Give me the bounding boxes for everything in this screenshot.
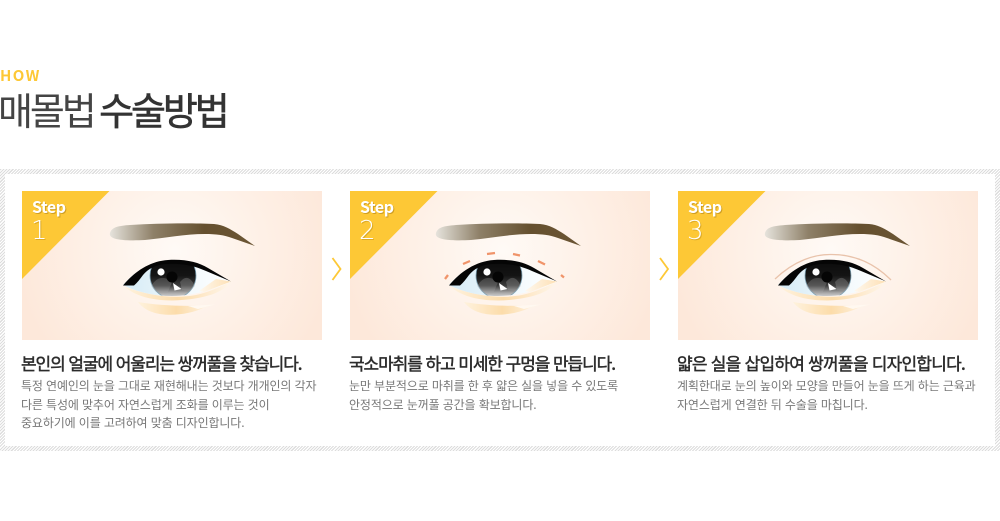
panel frame bbox=[0, 169, 1000, 451]
step 2 text: 안정적으로 눈꺼풀 공간을 확보합니다. bbox=[349, 396, 536, 412]
step 1 badge: Step bbox=[32, 194, 66, 218]
step 1 badge: 1 bbox=[31, 216, 48, 246]
panel: step 1 bbox=[22, 191, 322, 340]
arrow 2 bbox=[660, 258, 668, 280]
step 3 text bbox=[677, 377, 976, 412]
step 2 badge: Step bbox=[360, 194, 394, 218]
step 3 badge: Step bbox=[688, 194, 722, 218]
step 3 text: 자연스럽게 연결한 뒤 수술을 마칩니다. bbox=[677, 396, 868, 412]
panel: step 3 bbox=[678, 191, 978, 340]
step 2 badge: 2 bbox=[359, 216, 376, 246]
skin background 3 bbox=[678, 191, 978, 340]
step 1 badge bbox=[22, 191, 110, 279]
step 1 text bbox=[21, 377, 316, 431]
step 3 badge: 3 bbox=[687, 216, 704, 246]
arrow 1 bbox=[332, 258, 340, 280]
step 3 text: 계획한대로 눈의 높이와 모양을 만들어 눈을 뜨게 하는 근육과 bbox=[677, 377, 976, 394]
icon: eye step 3 bbox=[765, 223, 910, 315]
incision marks bbox=[445, 253, 564, 279]
step 2 heading: 국소마취를 하고 미세한 구멍을 만듭니다. bbox=[349, 350, 615, 375]
step 3 heading: 얇은 실을 삽입하여 쌍꺼풀을 디자인합니다. bbox=[677, 350, 965, 375]
skin background 2 bbox=[350, 191, 650, 340]
skin background 1 bbox=[22, 191, 322, 340]
eyebrow label: HOW: HOW bbox=[0, 65, 41, 86]
step 2 badge bbox=[350, 191, 438, 279]
step 1 text: 다른 특성에 맞추어 자연스럽게 조화를 이루는 것이 bbox=[21, 396, 270, 412]
panel: step 2 bbox=[350, 191, 650, 340]
step 1 heading: 본인의 얼굴에 어울리는 쌍꺼풀을 찾습니다. bbox=[21, 350, 301, 375]
step 2 text bbox=[349, 377, 618, 412]
title: 매몰법 수술방법 bbox=[0, 81, 227, 136]
step 1 text: 특정 연예인의 눈을 그대로 재현해내는 것보다 개개인의 각자 bbox=[21, 377, 316, 394]
icon: eye step 1 bbox=[110, 223, 255, 315]
eyelid crease bbox=[775, 254, 891, 280]
step 2 text: 눈만 부분적으로 마취를 한 후 얇은 실을 넣을 수 있도록 bbox=[349, 377, 618, 394]
step 3 badge bbox=[678, 191, 766, 279]
icon: eye step 2 bbox=[436, 223, 581, 315]
step 1 text: 중요하기에 이를 고려하여 맞춤 디자인합니다. bbox=[21, 414, 244, 431]
